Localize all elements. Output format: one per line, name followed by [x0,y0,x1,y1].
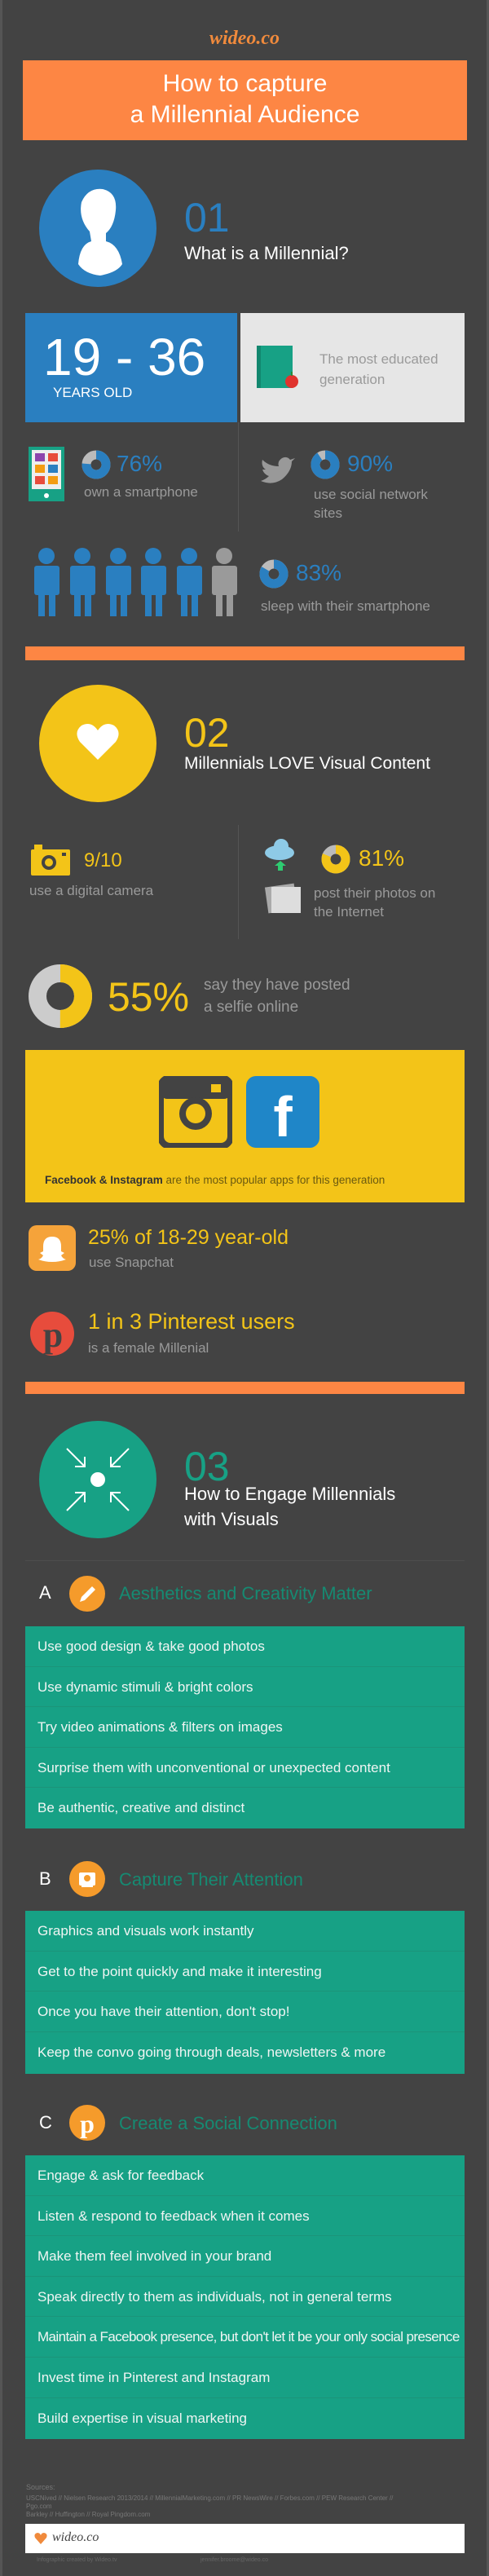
list C: Maintain a Facebook presence, but don't let it be your only social presence [37,2329,460,2344]
stat: snapchat: use Snapchat [89,1255,174,1270]
panel: most educated: generation [319,372,385,387]
stat: selfie 55% [29,964,350,1028]
vertical divider [238,825,239,939]
sources: USCNived // Nielsen Research 2013/2014 // MillennialMarketing.com // PR NewsWire // Forbes.com // PEW Research Center // Pgo.com [26,2494,393,2510]
panel: most educated: The most educated [319,351,438,367]
stat: selfie 55%: a selfie online [204,999,298,1016]
donut 76% [82,450,111,479]
list A: Use dynamic stimuli & bright colors [37,1679,253,1695]
stat: smartphone 76%: own a smartphone [84,484,198,500]
list C: Invest time in Pinterest and Instagram [37,2370,270,2385]
people icons [34,548,237,616]
heading 01 [184,195,349,263]
donut 90% [311,450,339,479]
stat: pinterest: is a female Millenial [88,1340,209,1356]
heading 02: Millennials LOVE Visual Content [184,754,430,773]
icon: focus circle [39,1421,156,1538]
stat: snapchat: 25% of 18-29 year-old [88,1226,289,1249]
stat: selfie 55%: say they have posted [204,977,350,994]
stat: snapchat [29,1225,289,1271]
stat: post photos 81%: 81% [359,845,404,871]
logo: wideo.co [209,28,280,49]
heading 02: 02 [184,710,230,756]
stat: camera 9/10: 9/10 [84,849,122,871]
heading 02 [184,710,430,773]
stat: post photos 81%: post their photos on [314,885,435,901]
panel: age [25,313,237,422]
text: Barkley // Huffington // Royal Pingdom.com [26,2511,150,2518]
subheading A: Aesthetics and Creativity Matter [119,1583,372,1603]
panel: age: YEARS OLD [53,385,132,400]
stat: camera 9/10 [29,845,153,898]
icon: user circle [39,170,156,287]
panel: popular apps [25,1050,465,1202]
stat: sleep 83% [259,559,430,614]
list C: Make them feel involved in your brand [37,2248,271,2264]
icon: phone [29,447,64,501]
stat: social network 90% [261,450,428,521]
list C: Speak directly to them as individuals, not in general terms [37,2289,392,2305]
stat: sleep 83%: sleep with their smartphone [261,598,430,614]
footer text: Infographic created by Wideo.tv [37,2557,117,2563]
stat: camera 9/10: use a digital camera [29,883,153,898]
icon: heart circle [39,685,156,802]
subheading A: A [39,1582,51,1603]
list C: Build expertise in visual marketing [37,2411,247,2426]
panel: most educated [240,313,465,422]
panel: popular apps: Facebook & Instagram are the most popular apps for this generation [45,1174,385,1186]
footer logo bar: wideo.co [52,2530,99,2544]
heading 01: What is a Millennial? [184,243,349,263]
title banner: a Millennial Audience [130,101,359,128]
stat: social network 90%: use social network [314,487,428,502]
list B: Keep the convo going through deals, newsletters & more [37,2044,385,2060]
heading 03: 03 [184,1444,230,1489]
stat: post photos 81% [265,839,435,920]
subheading A [39,1576,372,1612]
subheading B: B [39,1868,51,1889]
icon: twitter bird [261,457,295,483]
panel: age: 19 - 36 [43,328,205,386]
footer text: jennifer.broome@wideo.co [200,2557,268,2563]
icon: facebook [246,1076,319,1148]
list A: Use good design & take good photos [37,1639,265,1654]
list C [25,2155,465,2439]
list C: Engage & ask for feedback [37,2168,204,2183]
list B: Once you have their attention, don't stop! [37,2004,289,2019]
divider bar [25,1382,465,1394]
list A: Try video animations & filters on images [37,1719,283,1735]
heading 03 [184,1444,395,1529]
stat: pinterest [30,1309,295,1356]
stat: selfie 55%: 55% [108,974,189,1020]
list C: Listen & respond to feedback when it comes [37,2208,310,2224]
stat: social network 90%: sites [314,505,342,521]
sources: Sources: [26,2483,55,2491]
subheading B: Capture Their Attention [119,1869,303,1890]
stat: smartphone 76% [29,447,198,501]
divider bar [25,646,465,660]
icon: facebook: f [273,1085,293,1148]
list B: Graphics and visuals work instantly [37,1923,254,1939]
stat: pinterest: 1 in 3 Pinterest users [88,1309,295,1334]
list B: Get to the point quickly and make it interesting [37,1964,322,1979]
footer logo bar [25,2524,465,2553]
list A: Be authentic, creative and distinct [37,1800,244,1815]
vertical divider [238,422,239,532]
stat: smartphone 76%: 76% [117,451,162,476]
heading 03: with Visuals [184,1509,279,1529]
subheading B [39,1861,303,1897]
subheading C: p [80,2109,95,2138]
icon: cloud upload photos [265,839,301,913]
stat: social network 90%: 90% [347,451,393,476]
stat: post photos 81%: the Internet [314,904,384,920]
title banner: How to capture [163,70,327,97]
list A [25,1626,465,1828]
heading 03: How to Engage Millennials [184,1484,395,1504]
sources [26,2483,393,2518]
icon: book and apple [257,346,298,388]
icon: instagram [159,1076,232,1148]
subheading C: C [39,2112,52,2133]
subheading C [39,2105,337,2141]
list A: Surprise them with unconventional or unexpected content [37,1760,390,1775]
footer text [37,2556,268,2563]
title banner [23,60,467,140]
stat: sleep 83%: 83% [296,560,341,585]
list B [25,1911,465,2074]
heading 01: 01 [184,195,230,240]
subheading C: Create a Social Connection [119,2113,337,2133]
stat: pinterest: p [43,1315,63,1355]
